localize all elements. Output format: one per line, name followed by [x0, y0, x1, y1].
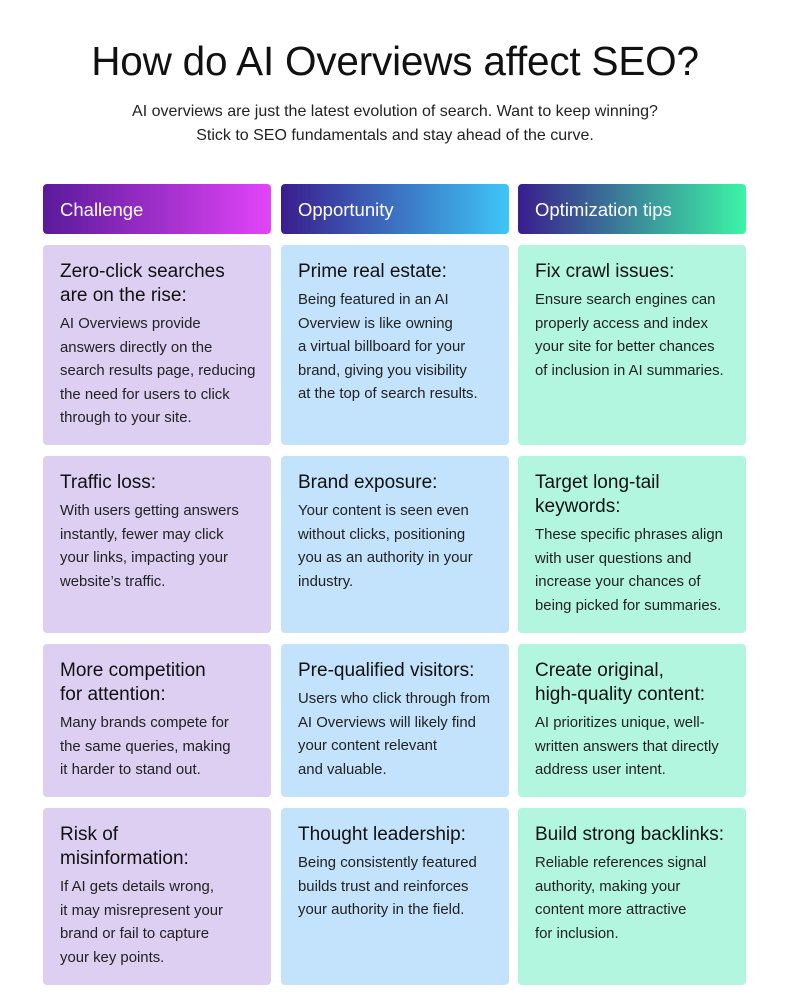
- subtitle: [132, 103, 658, 144]
- card: fix crawl issues: properly access and index: [535, 316, 708, 332]
- card: thought leadership: builds trust and reinforces: [298, 878, 469, 894]
- card: long-tail: These specific phrases align: [535, 527, 723, 543]
- card: brand exposure: [281, 456, 509, 633]
- card: original content: [518, 644, 746, 797]
- card: brand exposure: without clicks, positioning: [298, 526, 465, 542]
- card: prime real estate: Prime real estate:: [298, 261, 447, 282]
- card: thought leadership: Being consistently featured: [298, 855, 477, 871]
- card: zero-click: search results page, reducing: [60, 363, 255, 379]
- card: traffic loss: Traffic loss:: [60, 472, 156, 493]
- card: backlinks: Build strong backlinks:: [535, 824, 724, 845]
- card: prime real estate: Overview is like owning: [298, 316, 453, 332]
- title: How do AI Overviews affect SEO?: [91, 38, 699, 84]
- card: brand exposure: you as an authority in your: [298, 550, 473, 566]
- card: brand exposure: industry.: [298, 574, 353, 590]
- card: traffic loss: instantly, fewer may click: [60, 526, 224, 542]
- card: pre-qualified: [281, 644, 509, 797]
- card: traffic loss: your links, impacting your: [60, 550, 228, 566]
- card: prime real estate: a virtual billboard for your: [298, 339, 465, 355]
- card: competition: for attention:: [60, 684, 166, 705]
- card: brand exposure: Your content is seen even: [298, 503, 469, 519]
- card: misinformation: brand or fail to capture: [60, 926, 209, 942]
- card: misinformation: Risk of: [60, 824, 118, 845]
- card: long-tail: being picked for summaries.: [535, 598, 721, 614]
- card: traffic loss: [43, 456, 271, 633]
- header: challenge: Challenge: [60, 199, 143, 220]
- card: zero-click: Zero-click searches: [60, 261, 225, 282]
- subtitle: Stick to SEO fundamentals and stay ahead of the curve.: [196, 127, 594, 144]
- header: challenge: [43, 184, 271, 234]
- card: thought leadership: your authority in the field.: [298, 902, 464, 918]
- card: pre-qualified: Users who click through from: [298, 691, 490, 707]
- card: long-tail: [518, 456, 746, 633]
- header: opportunity: [281, 184, 509, 234]
- card: competition: it harder to stand out.: [60, 762, 201, 778]
- card: original content: written answers that directly: [535, 738, 719, 754]
- card: competition: the same queries, making: [60, 738, 231, 754]
- card: prime real estate: at the top of search results.: [298, 386, 478, 402]
- card: misinformation: misinformation:: [60, 848, 189, 869]
- card: zero-click: [43, 245, 271, 445]
- card: competition: [43, 644, 271, 797]
- card: thought leadership: Thought leadership:: [298, 824, 466, 845]
- card: long-tail: Target long-tail: [535, 472, 660, 493]
- card: long-tail: keywords:: [535, 496, 621, 517]
- subtitle: AI overviews are just the latest evolution of search. Want to keep winning?: [132, 103, 658, 120]
- card: misinformation: it may misrepresent your: [60, 902, 223, 918]
- card: misinformation: If AI gets details wrong,: [60, 879, 214, 895]
- card: prime real estate: [281, 245, 509, 445]
- card: fix crawl issues: Ensure search engines can: [535, 292, 715, 308]
- card: zero-click: are on the rise:: [60, 285, 187, 306]
- card: pre-qualified: Pre-qualified visitors:: [298, 660, 474, 681]
- header: optimization tips: [518, 184, 746, 234]
- card: original content: high-quality content:: [535, 684, 705, 705]
- card: prime real estate: Being featured in an AI: [298, 292, 449, 308]
- card: backlinks: content more attractive: [535, 902, 686, 918]
- card: zero-click: the need for users to click: [60, 386, 230, 402]
- card: backlinks: authority, making your: [535, 878, 680, 894]
- card: backlinks: Reliable references signal: [535, 855, 706, 871]
- card: prime real estate: brand, giving you visibility: [298, 362, 467, 378]
- card: backlinks: [518, 808, 746, 985]
- card: thought leadership: [281, 808, 509, 985]
- card: zero-click: AI Overviews provide: [60, 316, 201, 332]
- card: traffic loss: website’s traffic.: [60, 574, 165, 590]
- card: zero-click: answers directly on the: [60, 340, 212, 356]
- card: brand exposure: Brand exposure:: [298, 472, 437, 493]
- card: original content: Create original,: [535, 660, 664, 681]
- card: competition: More competition: [60, 660, 206, 681]
- card: pre-qualified: AI Overviews will likely find: [298, 714, 476, 730]
- header: opportunity: Opportunity: [298, 199, 394, 220]
- card: original content: AI prioritizes unique, well-: [535, 715, 705, 731]
- card: fix crawl issues: [518, 245, 746, 445]
- card: misinformation: [43, 808, 271, 985]
- card: traffic loss: With users getting answers: [60, 503, 239, 519]
- card: pre-qualified: and valuable.: [298, 762, 387, 778]
- card: backlinks: for inclusion.: [535, 926, 619, 942]
- card: competition: Many brands compete for: [60, 715, 229, 731]
- card: fix crawl issues: of inclusion in AI summaries.: [535, 362, 724, 378]
- card: long-tail: increase your chances of: [535, 574, 701, 590]
- card: original content: address user intent.: [535, 762, 666, 778]
- card: pre-qualified: your content relevant: [298, 738, 437, 754]
- card: fix crawl issues: Fix crawl issues:: [535, 261, 674, 282]
- card: misinformation: your key points.: [60, 950, 164, 966]
- card: zero-click: through to your site.: [60, 410, 192, 426]
- card: long-tail: with user questions and: [535, 550, 691, 566]
- card: fix crawl issues: your site for better chances: [535, 339, 715, 355]
- header: optimization tips: Optimization tips: [535, 199, 672, 220]
